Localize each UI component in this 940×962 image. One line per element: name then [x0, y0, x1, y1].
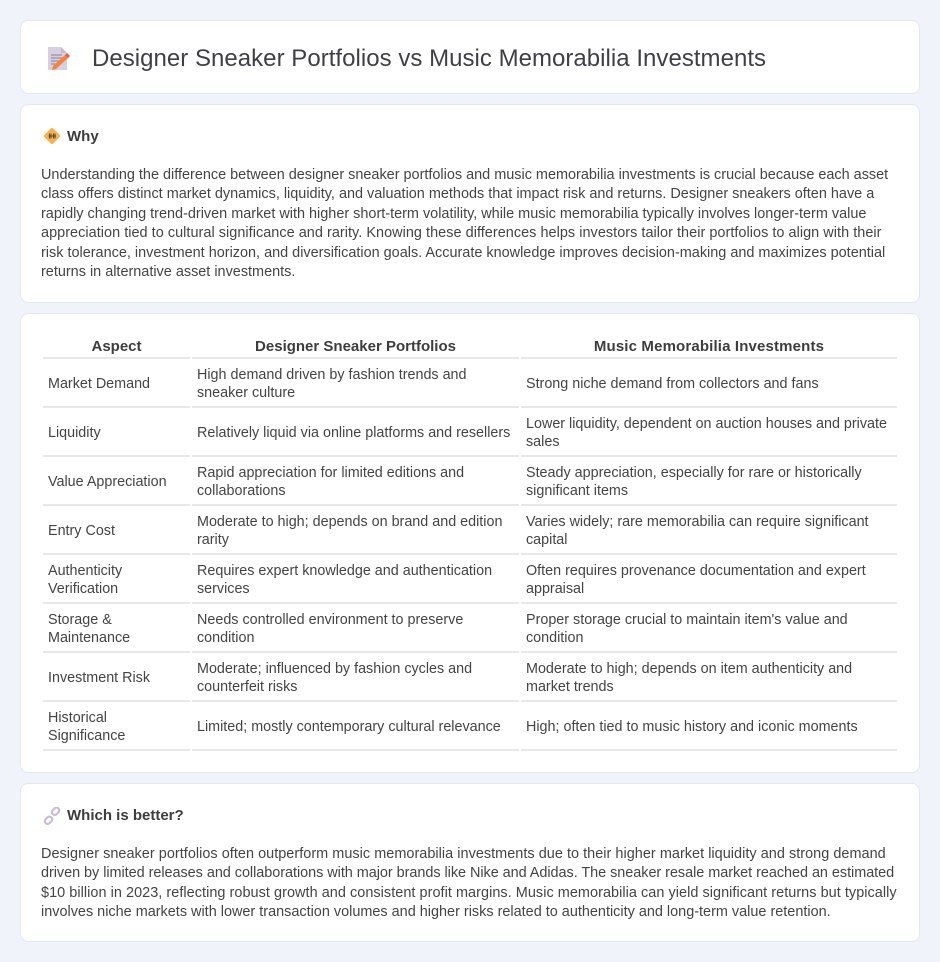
panel: comparison table: Relatively liquid via online platforms and resellers [197, 425, 510, 441]
panel: comparison table: High demand driven by fashion trends and [197, 367, 467, 383]
panel: comparison table: rarity [197, 532, 229, 548]
panel: comparison table: Verification [48, 581, 118, 597]
panel: comparison table: Varies widely; rare memorabilia can require significant [526, 514, 869, 530]
panel: which is better: involves niche markets with lower transaction volumes and higher risks related to authenticity and long-term value retention. [41, 904, 831, 920]
table header [91, 338, 824, 355]
heading: why: Why [67, 128, 99, 145]
panel: comparison table: Entry Cost [48, 523, 115, 539]
table row: historical significance [48, 710, 858, 744]
panel: comparison table: Historical [48, 710, 107, 726]
panel: comparison table: Proper storage crucial to maintain item's value and [526, 612, 848, 628]
text block: which is better paragraph [41, 846, 897, 920]
panel: comparison table: Requires expert knowledge and authentication [197, 563, 492, 579]
panel: comparison table: market trends [526, 679, 614, 695]
panel: comparison table: Value Appreciation [48, 474, 167, 490]
panel: why [20, 104, 920, 303]
panel: comparison table: Storage & [48, 612, 112, 628]
table row: storage and maintenance [48, 612, 848, 646]
panel: comparison table: Designer Sneaker Portfolios [255, 338, 456, 355]
panel: comparison table: Aspect [91, 338, 142, 355]
panel: comparison table: collaborations [197, 483, 286, 499]
panel: comparison table: Market Demand [48, 376, 150, 392]
panel: which is better: Designer sneaker portfolios often outperform music memorabilia investments due to their higher market liquidity and strong demand [41, 846, 886, 862]
panel: title header [20, 20, 920, 94]
panel: comparison table: sales [526, 434, 560, 450]
panel: comparison table: sneaker culture [197, 385, 295, 401]
icon: warning diamond [44, 128, 60, 144]
panel: which is better [20, 783, 920, 942]
panel: comparison table: condition [526, 630, 583, 646]
panel: comparison table: Investment Risk [48, 670, 150, 686]
panel: comparison table: capital [526, 532, 567, 548]
icon: document with pencil [48, 47, 70, 70]
panel: comparison table: significant items [526, 483, 628, 499]
panel: comparison table: appraisal [526, 581, 584, 597]
panel: comparison table: Needs controlled environment to preserve [197, 612, 463, 628]
panel: comparison table: Moderate to high; depends on brand and edition [197, 514, 502, 530]
table row: investment risk [48, 661, 852, 695]
panel: comparison table: Authenticity [48, 563, 122, 579]
panel: comparison table: Significance [48, 728, 125, 744]
panel: comparison table: Steady appreciation, especially for rare or historically [526, 465, 862, 481]
panel: comparison table: Rapid appreciation for limited editions and [197, 465, 464, 481]
text block: why paragraph [41, 167, 888, 280]
panel: why: rapidly changing trend-driven market with higher short-term volatility, while music memorabilia typically involves longer-term value [41, 206, 866, 222]
panel: which is better: $10 billion in 2023, reflecting robust growth and consistent profit margins. Music memorabilia can yield significant returns but typically [41, 885, 897, 901]
panel: comparison table: services [197, 581, 250, 597]
panel: comparison table: Music Memorabilia Investments [594, 338, 824, 355]
panel: comparison table: Liquidity [48, 425, 101, 441]
panel: comparison table: counterfeit risks [197, 679, 297, 695]
panel: why: returns in alternative asset investments. [41, 264, 295, 280]
icon: link [44, 807, 60, 825]
table row: value appreciation [48, 465, 862, 499]
panel: comparison table: Maintenance [48, 630, 130, 646]
panel: comparison table: High; often tied to music history and iconic moments [526, 719, 858, 735]
panel: comparison table: Limited; mostly contemporary cultural relevance [197, 719, 501, 735]
panel: comparison table: Moderate to high; depends on item authenticity and [526, 661, 852, 677]
panel: comparison table: Moderate; influenced by fashion cycles and [197, 661, 472, 677]
panel: why: risk tolerance, investment horizon, and diversification goals. Accurate knowledge improves decision-making and maximizes potential [41, 245, 885, 261]
panel: which is better: driven by limited releases and collaborations with major brands like Nike and Adidas. The sneaker resale market reached an estimated [41, 865, 894, 881]
title: Designer Sneaker Portfolios vs Music Memorabilia Investments [92, 45, 766, 72]
table row: liquidity [48, 416, 887, 450]
panel: comparison table: Lower liquidity, dependent on auction houses and private [526, 416, 887, 432]
panel: comparison table: condition [197, 630, 254, 646]
panel: why: Understanding the difference between designer sneaker portfolios and music memorabilia investments is crucial because each asset [41, 167, 888, 183]
panel: why: appreciation tied to cultural significance and rarity. Knowing these differences helps investors tailor their portfolios to align with their [41, 225, 881, 241]
panel: comparison table [20, 313, 920, 773]
table row: market demand [48, 367, 819, 401]
table row: authenticity verification [48, 563, 866, 597]
table row: entry cost [48, 514, 869, 548]
panel: comparison table: Strong niche demand from collectors and fans [526, 376, 819, 392]
heading: which is better: Which is better? [67, 807, 184, 824]
panel: why: class offers distinct market dynamics, liquidity, and valuation methods that impact risk and returns. Designer sneakers often have a [41, 186, 874, 202]
panel: comparison table: Often requires provenance documentation and expert [526, 563, 866, 579]
